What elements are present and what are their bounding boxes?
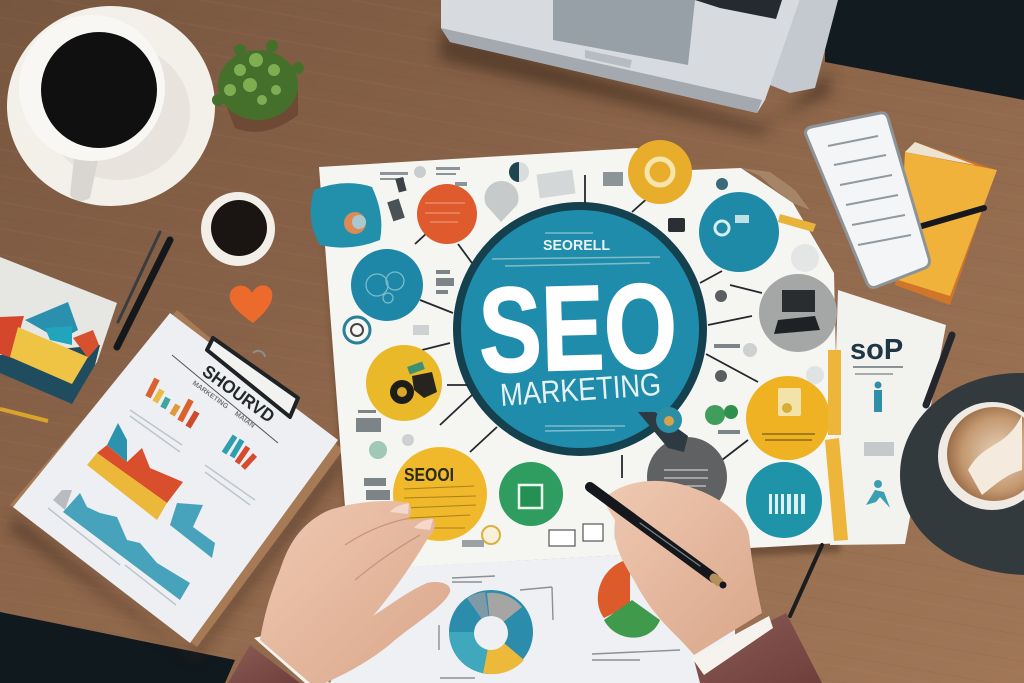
circle small heading: SEORELL: [543, 237, 610, 254]
clipboard clip: [207, 338, 298, 417]
right hand holding pen: [590, 481, 822, 683]
clipboard: [10, 310, 343, 647]
marketing word: MARKETING: [499, 367, 662, 414]
bottom sheet captions: [439, 576, 680, 678]
small doodles: [356, 166, 824, 547]
central SEO circle: [453, 202, 707, 456]
right side sheet: [830, 290, 946, 545]
donut chart: [449, 590, 533, 674]
area chart orange: [87, 423, 183, 520]
bar chart 2: [224, 436, 255, 468]
smartphone: [806, 113, 930, 287]
black pens: [117, 232, 170, 347]
area chart small: [170, 503, 215, 558]
pencil left: [0, 409, 48, 421]
heart: [230, 285, 272, 323]
yellow pencils: [825, 350, 848, 541]
sticky notes stack: [0, 257, 117, 404]
main SEO poster: [311, 140, 946, 567]
black pen: [590, 487, 726, 588]
SEO label: SEOOI: [404, 465, 454, 485]
yellow notebook: [895, 142, 997, 305]
saucer and coffee cup: [7, 6, 215, 206]
SEO wordmark: SEO: [477, 258, 679, 398]
clipboard subheading: MARKETING MAIAN: [191, 380, 256, 430]
pie chart: [598, 559, 660, 638]
clipboard heading: SHOURVD: [199, 361, 278, 427]
latte saucer and cup: [900, 373, 1024, 575]
black pencils right: [790, 335, 952, 616]
connector lines: [415, 175, 762, 478]
bottom chart sheet: [330, 552, 735, 683]
small espresso cup: [201, 192, 275, 266]
laptop: [441, 0, 838, 113]
right side sheet: soP: [850, 334, 903, 366]
area chart teal: [53, 490, 190, 600]
potted plant: [212, 40, 304, 132]
satellite icons: [311, 140, 837, 541]
bar chart 1: [148, 379, 197, 427]
magnifier: [638, 407, 688, 452]
left hand: [228, 501, 450, 683]
clipboard caption lines: [48, 410, 255, 605]
